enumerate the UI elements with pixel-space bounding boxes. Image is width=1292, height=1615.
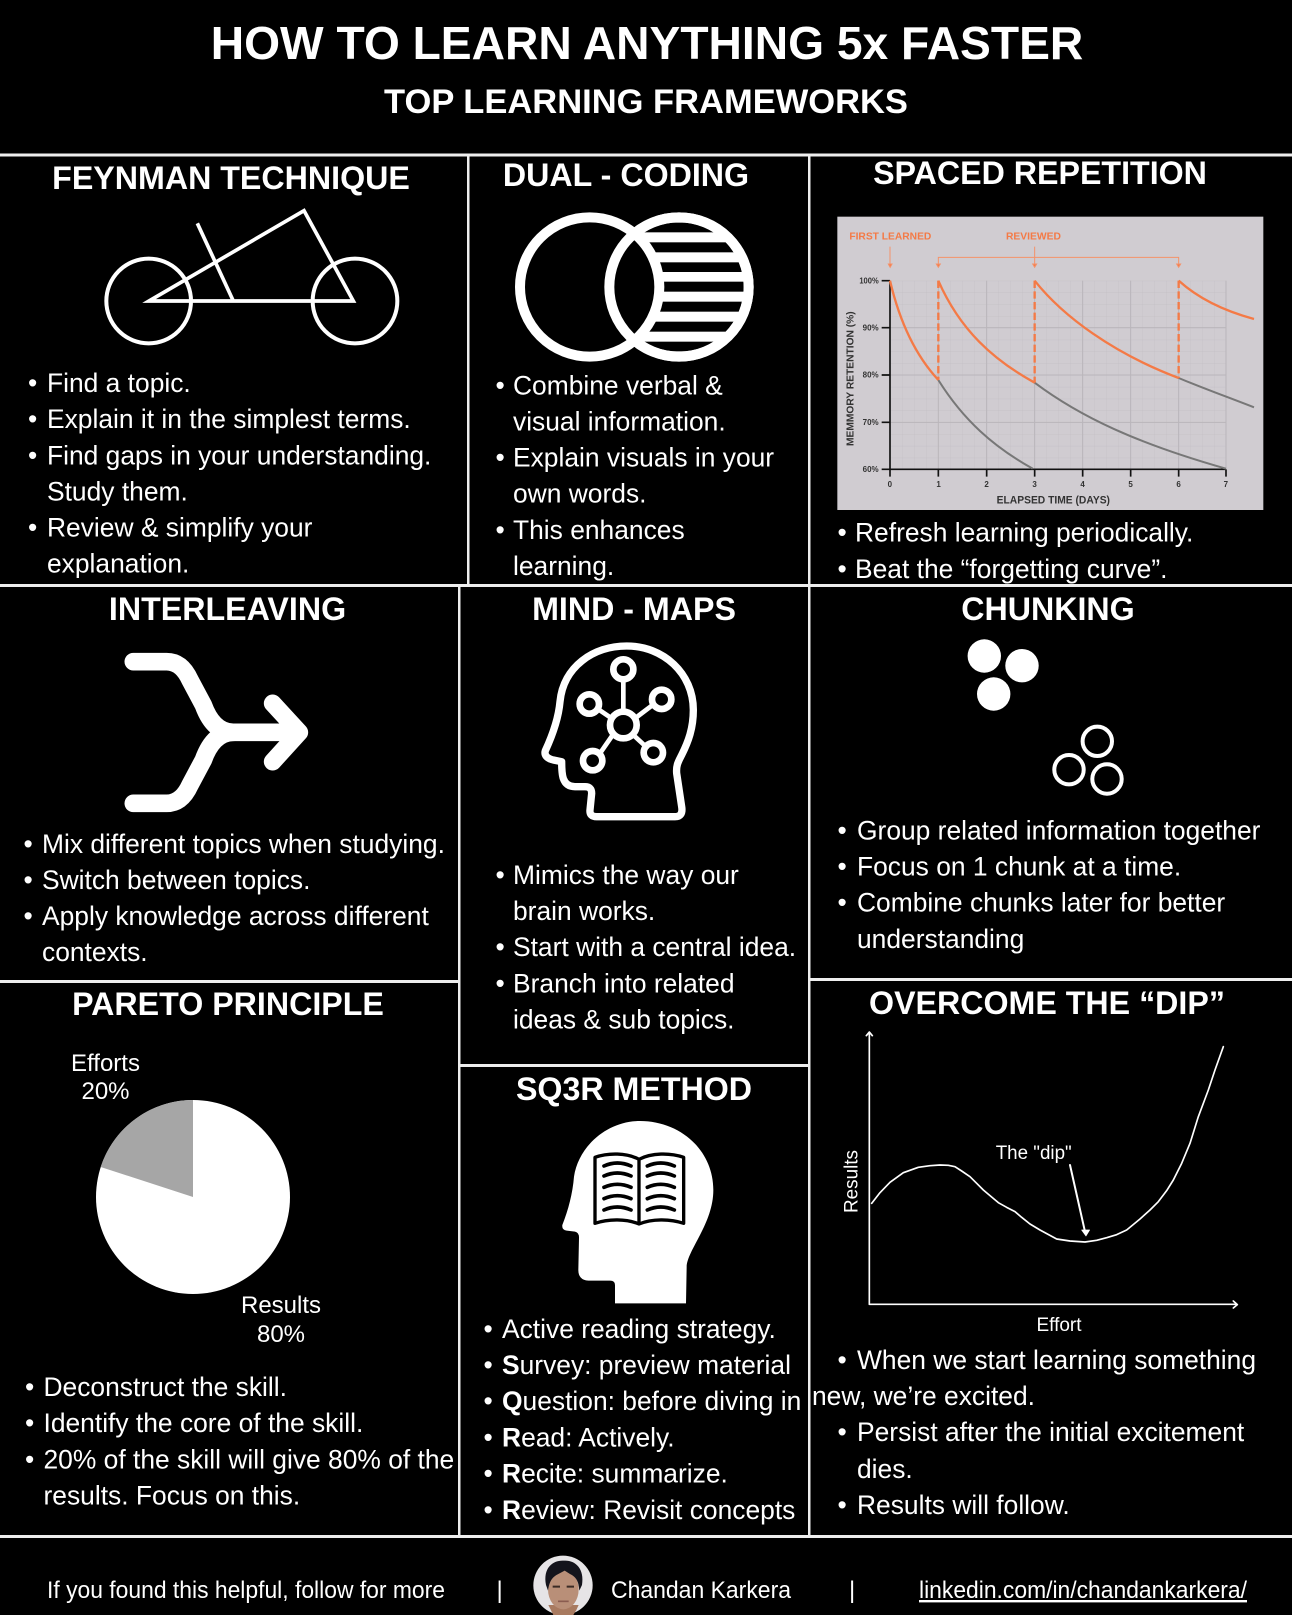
- icon: outlined circles: [1054, 727, 1122, 794]
- footer: |: [849, 1577, 855, 1604]
- bullet list: •: [28, 440, 37, 470]
- bullet list: Identify the core of the skill.: [44, 1408, 363, 1438]
- bullet list: •: [838, 816, 847, 846]
- main title: HOW TO LEARN ANYTHING 5x FASTER: [211, 17, 1083, 69]
- bullet list: When we start learning something: [857, 1345, 1256, 1375]
- pie label: efforts: Efforts: [71, 1050, 140, 1077]
- bullet list: 20% of the skill will give 80% of the: [44, 1444, 454, 1474]
- bullet list: dies.: [857, 1454, 913, 1484]
- bullet list: Survey: preview material: [502, 1350, 791, 1380]
- heading: OVERCOME THE “DIP”: [869, 985, 1225, 1021]
- bullet list: •: [496, 968, 505, 998]
- axis tick labels: 0: [888, 480, 893, 489]
- bullet list: own words.: [513, 478, 646, 508]
- axis tick labels: 1: [936, 480, 941, 489]
- panel: overcome the dip: [812, 985, 1256, 1520]
- heading: PARETO PRINCIPLE: [72, 986, 384, 1022]
- bullet list: Combine chunks later for better: [857, 888, 1225, 918]
- icon: merging arrow: [133, 662, 299, 803]
- bullet list: Active reading strategy.: [502, 1314, 776, 1344]
- bullet list: Read: Actively.: [502, 1422, 675, 1452]
- footer: |: [496, 1577, 503, 1604]
- pie label: results: [241, 1292, 321, 1348]
- icon: bicycle: [106, 211, 397, 343]
- grey decay curves: [938, 378, 1254, 469]
- chart: forgetting curve: ELAPSED TIME (DAYS): [997, 494, 1110, 506]
- axis tick labels: 5: [1128, 480, 1133, 489]
- bullet list: ideas & sub topics.: [513, 1004, 735, 1034]
- linkedin url: linkedin.com/in/chandankarkera/: [919, 1577, 1247, 1604]
- axis tick labels: [859, 276, 1229, 489]
- heading: FEYNMAN TECHNIQUE: [52, 160, 410, 196]
- bullet list: •: [28, 404, 37, 434]
- icon: head with network: [545, 646, 693, 817]
- bullet list: •: [838, 852, 847, 882]
- bullet list: •: [496, 932, 505, 962]
- bullet list: [838, 518, 1193, 584]
- bullet list: Refresh learning periodically.: [855, 518, 1193, 548]
- icon: filled circles: [968, 639, 1039, 711]
- chart: the dip curve: Results: [840, 1150, 862, 1213]
- bullet list: •: [484, 1350, 493, 1380]
- bullet list: Explain it in the simplest terms.: [47, 404, 411, 434]
- bullet list: Mimics the way our: [513, 860, 739, 890]
- bullet list: [838, 816, 1261, 954]
- bullet list: Beat the “forgetting curve”.: [855, 554, 1167, 584]
- bullet list: [496, 860, 796, 1034]
- title block: [211, 17, 1083, 121]
- bullet list: Switch between topics.: [42, 865, 310, 895]
- bullet list: Question: before diving in: [502, 1386, 801, 1416]
- bullet list: •: [484, 1386, 493, 1416]
- axis tick labels: 80%: [863, 371, 879, 380]
- bullet list: Review: Revisit concepts: [502, 1495, 795, 1525]
- bullet list: understanding: [857, 924, 1024, 954]
- panel: chunking: [838, 591, 1261, 954]
- heading: CHUNKING: [961, 591, 1135, 627]
- bullet list: Persist after the initial excitement: [857, 1417, 1245, 1447]
- bullet list: Apply knowledge across different: [42, 901, 429, 931]
- bullet list: •: [484, 1422, 493, 1452]
- bullet list: [484, 1314, 801, 1525]
- call to action: If you found this helpful, follow for more: [47, 1577, 445, 1604]
- bullet list: •: [24, 829, 33, 859]
- chart: forgetting curve: REVIEWED: [1006, 231, 1061, 242]
- bullet list: •: [25, 1444, 34, 1474]
- axis tick labels: 70%: [863, 418, 879, 427]
- bullet list: Group related information together: [857, 816, 1261, 846]
- bullet list: Mix different topics when studying.: [42, 829, 445, 859]
- bullet list: new, we’re excited.: [812, 1381, 1035, 1411]
- axis tick labels: 3: [1032, 480, 1037, 489]
- bullet list: Focus on 1 chunk at a time.: [857, 852, 1181, 882]
- bullet list: •: [484, 1314, 493, 1344]
- panel: spaced repetition: [837, 155, 1263, 584]
- axis tick labels: 2: [984, 480, 989, 489]
- author name: Chandan Karkera: [611, 1577, 792, 1604]
- chart: forgetting curve: FIRST LEARNED: [849, 231, 931, 242]
- axis tick labels: 6: [1176, 480, 1181, 489]
- bullet list: Combine verbal &: [513, 370, 723, 400]
- subtitle: TOP LEARNING FRAMEWORKS: [384, 83, 908, 121]
- pie label: results: 80%: [257, 1321, 305, 1348]
- panel: Feynman technique: [28, 160, 431, 578]
- icon: venn diagram with stripes: [520, 212, 754, 362]
- bullet list: Find gaps in your understanding.: [47, 440, 431, 470]
- author photo: [533, 1556, 593, 1615]
- bullet list: •: [25, 1408, 34, 1438]
- panel: dual coding: [496, 157, 774, 581]
- axis tick labels: 4: [1080, 480, 1085, 489]
- chart: forgetting curve: [837, 217, 1263, 510]
- bullet list: •: [28, 512, 37, 542]
- bullet list: learning.: [513, 551, 614, 581]
- footer: [47, 1556, 1247, 1615]
- bullet list: •: [28, 368, 37, 398]
- panel: pareto principle: [25, 986, 454, 1510]
- heading: SQ3R METHOD: [516, 1071, 752, 1107]
- bullet list: visual information.: [513, 406, 726, 436]
- bullet list: Start with a central idea.: [513, 932, 796, 962]
- panel: interleaving: [24, 591, 445, 967]
- review markers: [888, 247, 1181, 267]
- bullet list: contexts.: [42, 937, 148, 967]
- bullet list: [496, 370, 774, 581]
- bullet list: •: [838, 554, 847, 584]
- chart: the dip curve: Effort: [1036, 1314, 1082, 1336]
- bullet list: •: [838, 1490, 847, 1520]
- axis tick labels: 60%: [863, 465, 879, 474]
- bullet list: Branch into related: [513, 968, 735, 998]
- bullet list: •: [24, 865, 33, 895]
- panel: SQ3R method: [484, 1071, 801, 1525]
- bullet list: •: [496, 860, 505, 890]
- axis tick labels: 100%: [859, 276, 879, 285]
- bullet list: •: [24, 901, 33, 931]
- bullet list: •: [496, 442, 505, 472]
- bullet list: [812, 1345, 1256, 1520]
- bullet list: [25, 1372, 454, 1510]
- bullet list: •: [484, 1495, 493, 1525]
- bullet list: •: [496, 370, 505, 400]
- bullet list: •: [838, 1345, 847, 1375]
- bullet list: •: [25, 1372, 34, 1402]
- bullet list: •: [484, 1458, 493, 1488]
- panel: mind maps: [496, 591, 796, 1034]
- bullet list: •: [838, 888, 847, 918]
- heading: SPACED REPETITION: [873, 155, 1207, 191]
- bullet list: Recite: summarize.: [502, 1458, 728, 1488]
- icon: head with open book: [562, 1121, 713, 1303]
- axis tick labels: 90%: [863, 323, 879, 332]
- orange retention curves: [890, 281, 1254, 383]
- bullet list: This enhances: [513, 515, 685, 545]
- bullet list: results. Focus on this.: [44, 1480, 300, 1510]
- bullet list: Study them.: [47, 476, 188, 506]
- bullet list: Explain visuals in your: [513, 442, 774, 472]
- bullet list: •: [838, 1417, 847, 1447]
- chart: the dip curve: [840, 1032, 1237, 1336]
- pie chart: [96, 1100, 290, 1294]
- bullet list: [24, 829, 445, 967]
- chart: the dip curve: The "dip": [996, 1142, 1072, 1164]
- bullet list: [28, 368, 431, 578]
- bullet list: brain works.: [513, 896, 655, 926]
- bullet list: •: [838, 518, 847, 548]
- pie label: efforts: 20%: [81, 1078, 130, 1105]
- bullet list: Find a topic.: [47, 368, 191, 398]
- heading: MIND - MAPS: [532, 591, 736, 627]
- bullet list: •: [496, 515, 505, 545]
- heading: DUAL - CODING: [503, 157, 749, 193]
- pie label: results: Results: [241, 1292, 321, 1319]
- bullet list: Review & simplify your: [47, 512, 313, 542]
- heading: INTERLEAVING: [109, 591, 346, 627]
- pie label: efforts: [71, 1050, 140, 1105]
- axis tick labels: 7: [1224, 480, 1229, 489]
- bullet list: explanation.: [47, 548, 189, 578]
- bullet list: Deconstruct the skill.: [44, 1372, 287, 1402]
- bullet list: Results will follow.: [857, 1490, 1070, 1520]
- chart: forgetting curve: MEMMORY RETENTION (%): [846, 311, 857, 446]
